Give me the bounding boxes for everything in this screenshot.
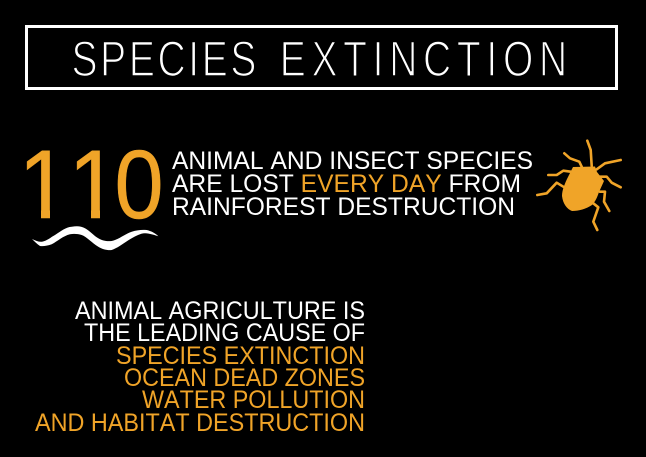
title banner: EXTINCTION xyxy=(280,30,573,87)
title banner xyxy=(26,26,616,88)
leading cause text block: OCEAN DEAD ZONES xyxy=(124,364,365,392)
statistic text xyxy=(172,147,533,221)
big number 110: 1 xyxy=(68,131,120,240)
title banner: SPECIES xyxy=(72,30,273,87)
statistic text: RAINFOREST DESTRUCTION xyxy=(172,193,515,221)
big number 110 xyxy=(18,130,164,240)
leading cause text block: WATER POLLUTION xyxy=(142,386,365,414)
icon: insect xyxy=(537,141,621,230)
icon: white worm xyxy=(32,226,158,250)
leading cause text block: AND HABITAT DESTRUCTION xyxy=(35,409,365,437)
statistic text: ARE LOST EVERY DAY FROM xyxy=(172,170,521,198)
big number 110: 1 xyxy=(18,131,70,240)
leading cause text block: SPECIES EXTINCTION xyxy=(116,342,365,370)
leading cause text block xyxy=(35,297,365,437)
leading cause text block: THE LEADING CAUSE OF xyxy=(84,319,365,347)
leading cause text block: ANIMAL AGRICULTURE IS xyxy=(75,297,365,325)
statistic text: ANIMAL AND INSECT SPECIES xyxy=(172,147,533,175)
big number 110: 0 xyxy=(114,130,164,239)
